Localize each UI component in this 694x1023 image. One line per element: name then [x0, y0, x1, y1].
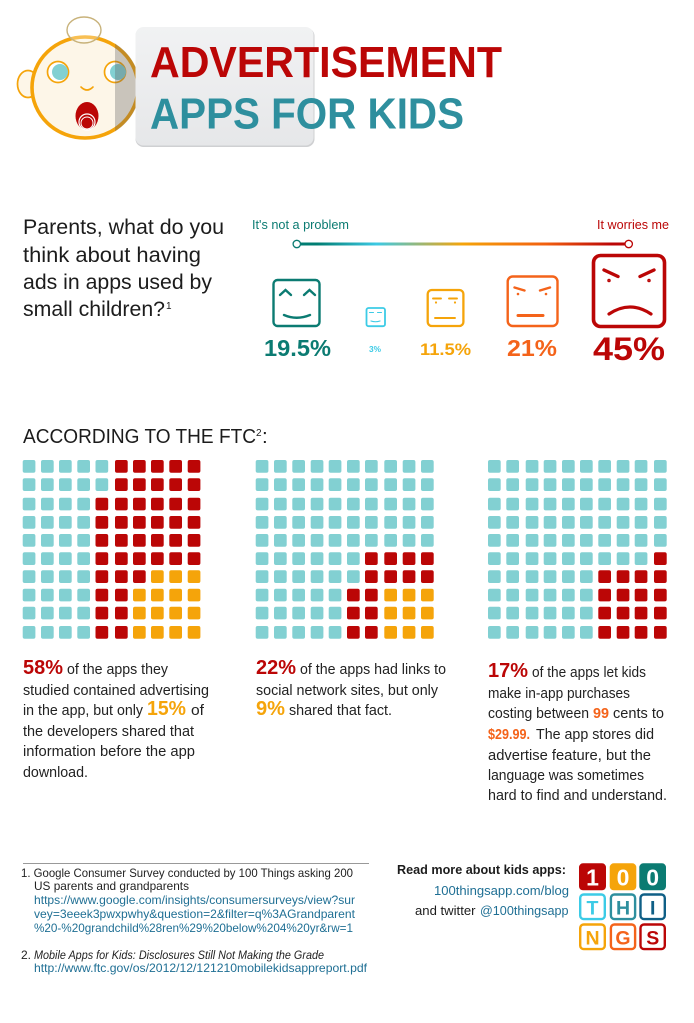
- text block: 17% in-app purchases: 17%: [488, 660, 528, 682]
- footnotes: https://www.google.com/insights/consumersurveys/view?sur: [34, 893, 355, 907]
- footnotes: 1. Google Consumer Survey conducted by 100 Things asking 200: [21, 866, 353, 880]
- title: apps for kids: APPS FOR KIDS: [150, 90, 464, 138]
- survey question: 1: [166, 301, 172, 312]
- logo: 100 things: N: [585, 927, 600, 949]
- icon: neutral face 11.5%: [428, 290, 463, 326]
- text block: 22% social links: of the apps had links to: [300, 662, 446, 678]
- heading: according to the FTC: 2: [256, 428, 262, 439]
- logo: 100 things: 0: [617, 864, 629, 890]
- read more links: @100thingsapp: [480, 904, 569, 918]
- text block: 22% social links: 22%: [256, 657, 296, 679]
- logo: 100 things: 1: [586, 864, 599, 890]
- footnotes: 2.: [21, 948, 31, 962]
- logo: 100 things: 0: [646, 864, 659, 890]
- waffle chart 1: [23, 460, 200, 639]
- footnotes: Mobile Apps for Kids: Disclosures Still Not Making the Grade: [34, 948, 324, 962]
- text block: 58% advertising: of: [191, 703, 205, 719]
- figure: 11.5%: 11.5%: [420, 340, 471, 359]
- text block: 22% social links: shared that fact.: [289, 703, 392, 719]
- logo: 100 things: [579, 863, 666, 949]
- logo: 100 things: S: [646, 927, 659, 949]
- title panel: [136, 27, 502, 147]
- icon: mild face 3%: [366, 308, 385, 326]
- icon: angry face 45%: [594, 256, 664, 326]
- footnotes: %20-%20grandchild%28ren%29%20below%204%20yr&rw=1: [34, 921, 353, 935]
- title: advertisement: ADVERTISEMENT: [150, 38, 502, 87]
- heading: according to the FTC: ACCORDING TO THE FTC: [23, 425, 256, 448]
- text block: 58% advertising: [23, 657, 209, 781]
- logo: 100 things: T: [587, 897, 599, 919]
- icon: annoyed face 21%: [508, 276, 558, 326]
- text block: 58% advertising: 15%: [147, 698, 186, 720]
- text block: 17% in-app purchases: The app stores did: [536, 727, 654, 743]
- text block: 58% advertising: download.: [23, 765, 88, 781]
- worry scale: It worries me: [597, 218, 669, 232]
- text block: 58% advertising: of the apps they: [67, 662, 169, 678]
- survey question: [23, 216, 224, 321]
- survey question: ads in apps used by: [23, 271, 213, 294]
- text block: 17% in-app purchases: language was sometimes: [488, 768, 644, 784]
- text block: 58% advertising: 58%: [23, 657, 63, 679]
- text block: 17% in-app purchases: $29.99.: [488, 727, 530, 743]
- footnotes: US parents and grandparents: [34, 879, 189, 893]
- figure: 3%: 3%: [369, 345, 381, 354]
- read more links: 100thingsapp.com/blog: [434, 884, 569, 898]
- waffle chart 3: [488, 460, 667, 639]
- worry scale: It's not a problem: [252, 218, 349, 232]
- text block: 17% in-app purchases: cents to: [613, 706, 664, 722]
- read more links: Read more about kids apps:: [397, 863, 566, 877]
- worry scale: [252, 218, 669, 248]
- text block: 22% social links: social network sites, but only: [256, 683, 439, 699]
- text block: 17% in-app purchases: hard to find and understand.: [488, 788, 667, 804]
- footnotes: http://www.ftc.gov/os/2012/12/121210mobilekidsappreport.pdf: [34, 961, 368, 975]
- waffle chart 2: [256, 460, 434, 639]
- footnotes: [21, 863, 369, 975]
- heading: according to the FTC: :: [262, 425, 268, 448]
- survey question: small children?: [23, 298, 165, 321]
- read more links: and twitter: [415, 904, 476, 918]
- text block: 17% in-app purchases: advertise feature, but the: [488, 748, 651, 764]
- logo: 100 things: I: [650, 897, 655, 919]
- text block: 58% advertising: information before the app: [23, 744, 195, 760]
- figure: 45%: 45%: [593, 331, 665, 367]
- text block: 17% in-app purchases: 99: [593, 706, 609, 722]
- text block: 58% advertising: the developers shared that: [23, 724, 194, 740]
- logo: 100 things: G: [615, 927, 631, 949]
- icon: baby face: [18, 17, 140, 145]
- survey question: Parents, what do you: [23, 216, 224, 239]
- survey question: think about having: [23, 244, 201, 267]
- text block: 17% in-app purchases: make in-app purchases: [488, 686, 630, 702]
- text block: 22% social links: 9%: [256, 698, 285, 720]
- figure: 19.5%: 19.5%: [264, 335, 331, 361]
- text block: 17% in-app purchases: of the apps let kids: [532, 665, 646, 681]
- text block: 17% in-app purchases: [488, 660, 667, 804]
- text block: 58% advertising: studied contained advertising: [23, 683, 209, 699]
- logo: 100 things: H: [616, 897, 630, 919]
- footnotes: vey=3eeek3pwxpwhy&question=2&filter=q%3AGrandparent: [34, 907, 356, 921]
- figure: 21%: 21%: [507, 335, 557, 361]
- read more links: [397, 863, 569, 918]
- text block: 58% advertising: in the app, but only: [23, 703, 144, 719]
- text block: 17% in-app purchases: costing between: [488, 706, 589, 722]
- text block: 22% social links: [256, 657, 446, 720]
- icon: happy face 19.5%: [274, 280, 320, 326]
